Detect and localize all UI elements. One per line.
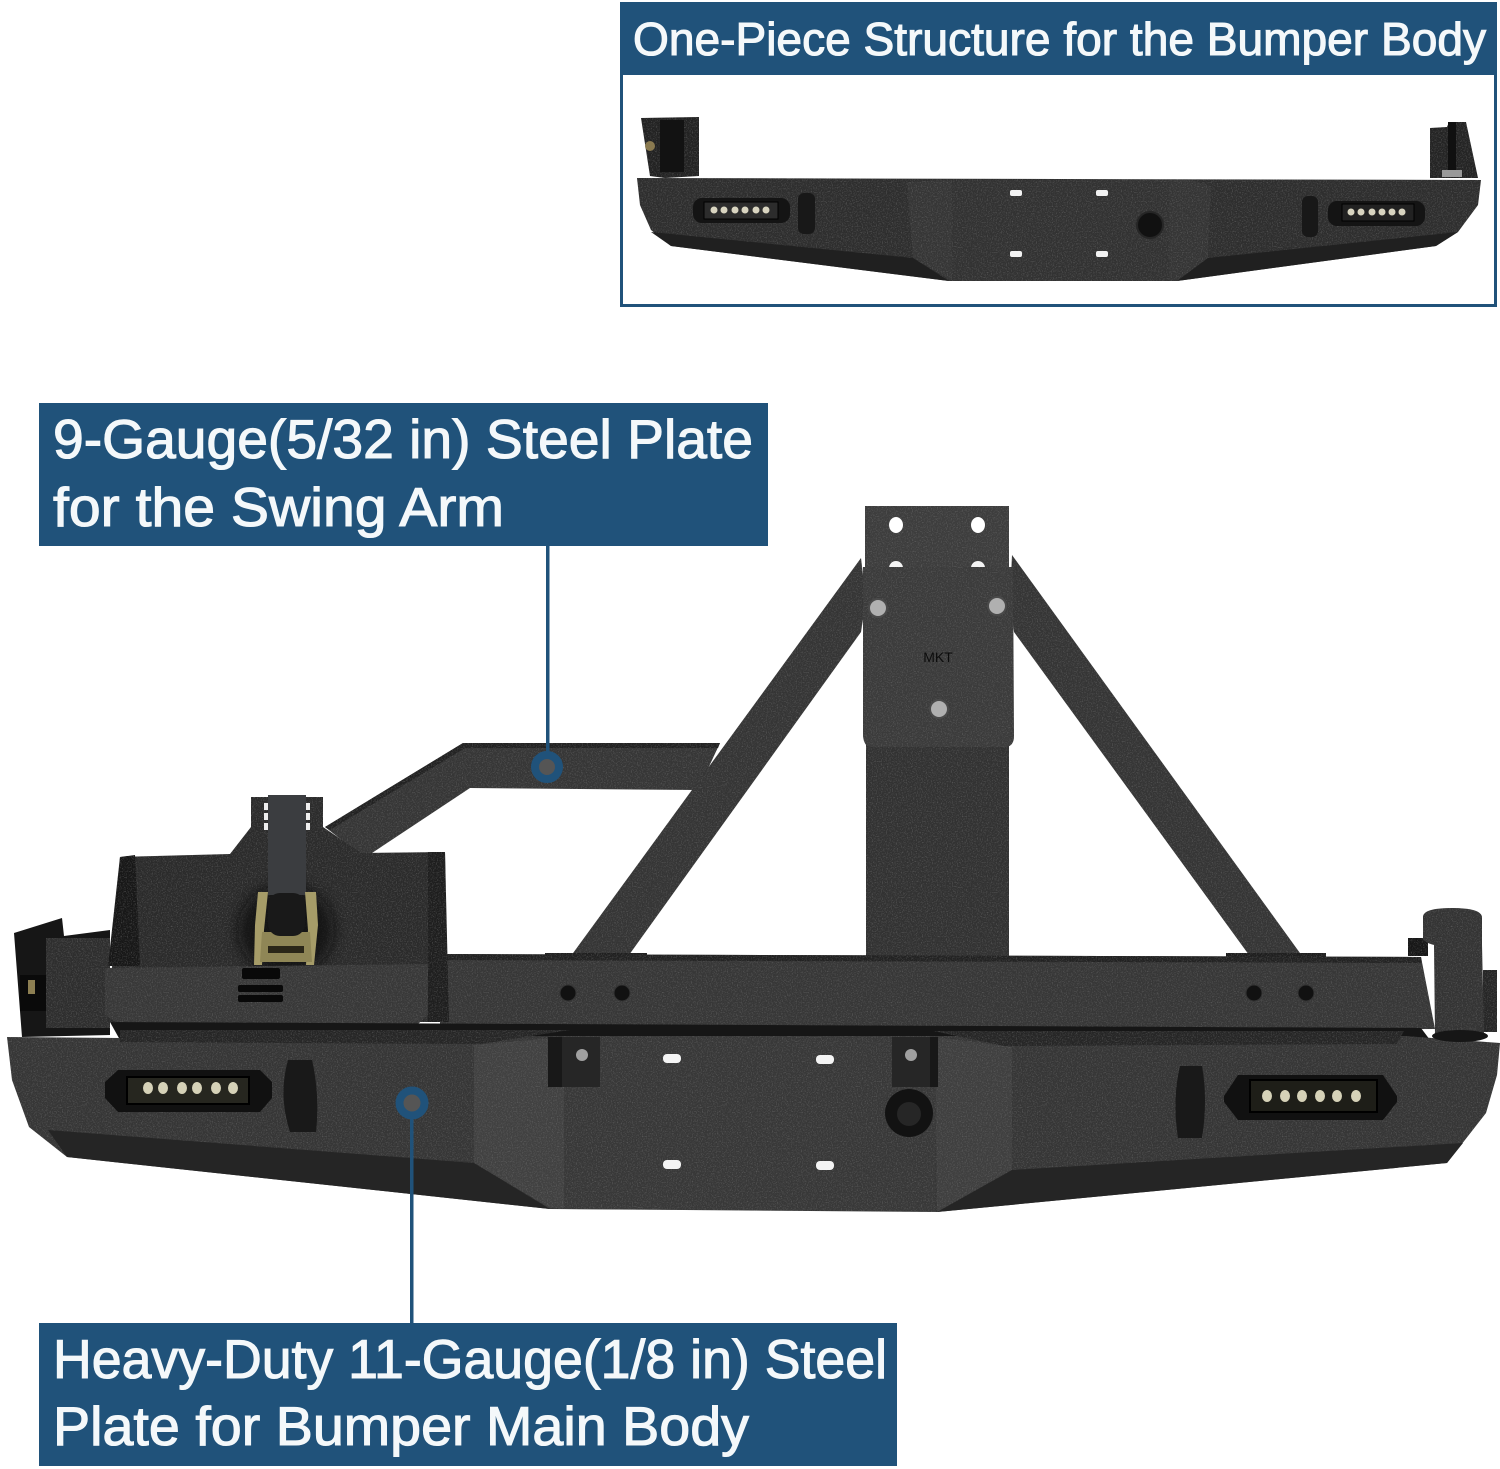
storage box with ratchet strap xyxy=(105,795,449,1025)
swing bar xyxy=(440,954,1435,1031)
leader line and target ring xyxy=(535,546,559,779)
callout label: 9-Gauge(5/32 in) Steel Plate xyxy=(53,408,753,470)
panel: one-piece structure xyxy=(620,2,1497,306)
callout label: for the Swing Arm xyxy=(53,476,504,538)
left lamp xyxy=(105,1070,272,1112)
carrier bolts xyxy=(869,597,1006,718)
swing arm and spare tire carrier xyxy=(14,506,1497,1040)
callout label xyxy=(39,403,768,546)
leader line and target ring xyxy=(400,1090,424,1324)
hinge assembly xyxy=(1408,908,1497,1038)
callout: swing arm xyxy=(39,403,768,779)
panel heading: One-Piece Structure for the Bumper Body xyxy=(633,13,1486,65)
small bumper knob xyxy=(1137,212,1163,238)
left hanger bracket xyxy=(548,1037,600,1087)
ratchet xyxy=(254,892,318,965)
callout label: Heavy-Duty 11-Gauge(1/8 in) Steel xyxy=(53,1328,887,1390)
callout label: Plate for Bumper Main Body xyxy=(53,1395,750,1457)
lower chamfers xyxy=(48,1130,1463,1212)
left end bracket xyxy=(14,918,110,1037)
tow knob xyxy=(885,1089,933,1137)
small bumper right lamp xyxy=(1328,201,1425,226)
main bumper body xyxy=(7,1030,1500,1212)
small bumper D-ring mounts xyxy=(798,193,1318,237)
tray front xyxy=(105,964,428,1025)
strap holes xyxy=(264,803,310,830)
strap xyxy=(268,795,306,895)
gap shelf between bar and bumper xyxy=(110,1022,1430,1040)
small bumper left lamp xyxy=(693,198,790,223)
hinge foot xyxy=(1432,1030,1488,1042)
tire carrier post xyxy=(866,745,1009,959)
swing bar bolts xyxy=(560,985,1314,1001)
panel heading xyxy=(620,2,1497,75)
swing arm bar xyxy=(325,743,720,855)
small bumper photo xyxy=(637,117,1481,281)
D-ring mounts xyxy=(283,1060,1205,1138)
MKT mark: MKT xyxy=(923,649,953,665)
callout label xyxy=(39,1323,897,1466)
tire carrier top plate xyxy=(865,506,1009,570)
callout: bumper main body xyxy=(39,1090,897,1466)
right hanger bracket xyxy=(892,1037,938,1087)
right lamp xyxy=(1224,1075,1397,1120)
box slots xyxy=(238,968,283,1002)
ratchet shadow xyxy=(238,885,334,975)
tire carrier mount plate xyxy=(863,567,1014,747)
triangle struts xyxy=(545,555,1326,960)
plate slots xyxy=(663,1054,834,1170)
small bumper plate slots xyxy=(1010,190,1108,257)
